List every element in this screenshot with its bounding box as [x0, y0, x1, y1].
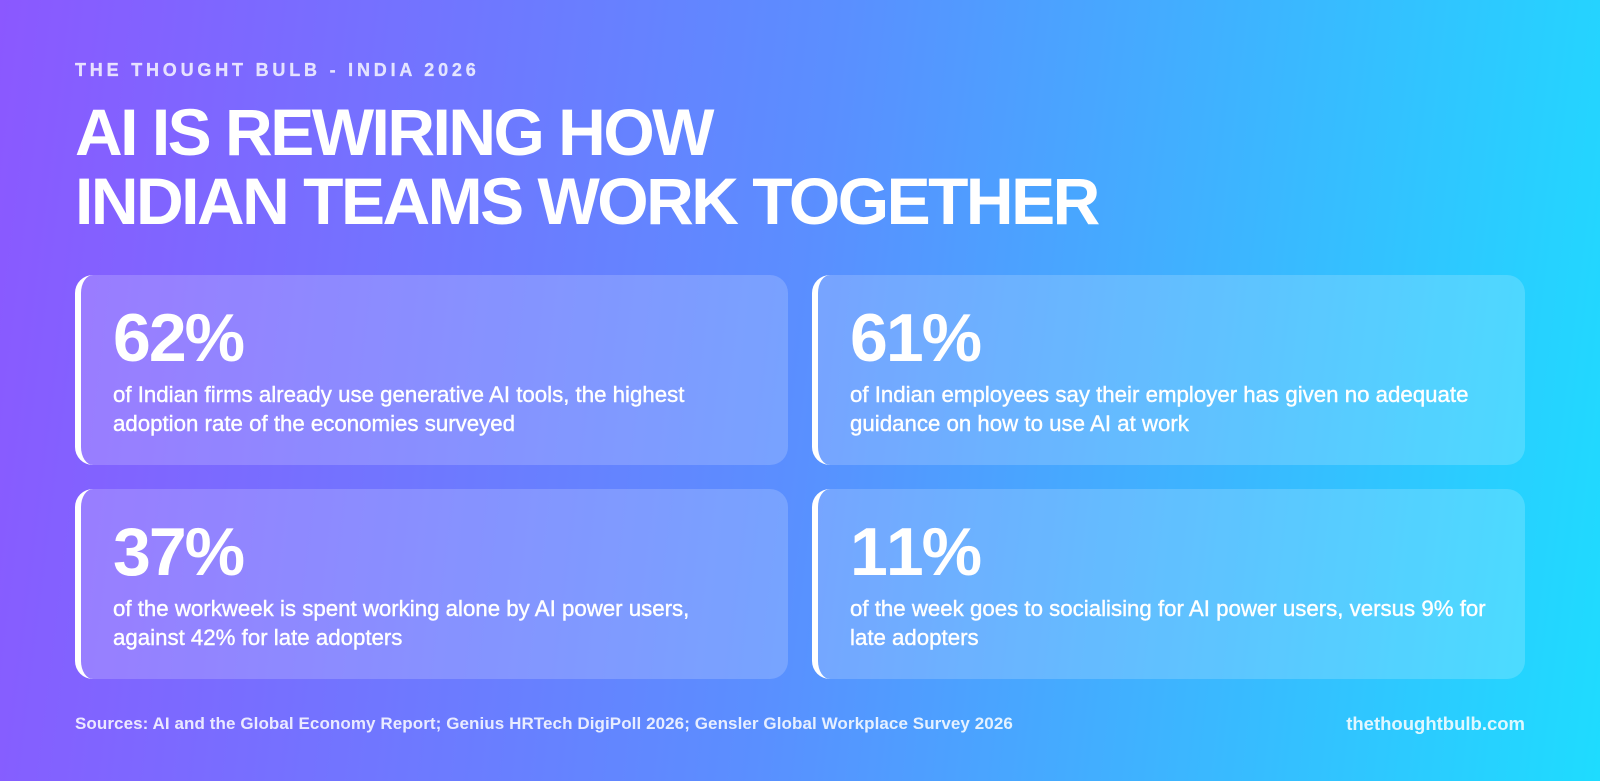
stat: 37%: 37% [113, 514, 243, 590]
description: firms: adoption rate of the economies surveyed [113, 411, 515, 436]
description: firms [113, 382, 684, 436]
stat: 11%: 11% [850, 514, 980, 590]
sources footer: Sources: AI and the Global Economy Report; Genius HRTech DigiPoll 2026; Gensler Global Workplace Survey 2026 [75, 714, 1013, 733]
description: socialising [850, 596, 1486, 650]
description: socialising: of the week goes to socialising for AI power users, versus 9% for [850, 596, 1486, 621]
description: guidance [850, 382, 1468, 436]
description: working alone: against 42% for late adopters [113, 625, 402, 650]
description: guidance: of Indian employees say their employer has given no adequate [850, 382, 1468, 407]
description: socialising: late adopters [850, 625, 979, 650]
description: working alone [113, 596, 689, 650]
title: AI IS REWIRING HOW [75, 95, 712, 169]
panel: working alone [75, 489, 788, 679]
panel: employer guidance [812, 275, 1525, 465]
stat: 62%: 62% [113, 300, 243, 376]
website link: thethoughtbulb.com [1346, 713, 1525, 734]
description: guidance: guidance on how to use AI at work [850, 411, 1189, 436]
panel: socialising [812, 489, 1525, 679]
stat: 61%: 61% [850, 300, 980, 376]
panel: firms using generative AI [75, 275, 788, 465]
title [75, 95, 1099, 238]
title: INDIAN TEAMS WORK TOGETHER [75, 164, 1098, 238]
description: working alone: of the workweek is spent working alone by AI power users, [113, 596, 689, 621]
eyebrow label: THE THOUGHT BULB - INDIA 2026 [75, 60, 480, 80]
description: firms: of Indian firms already use generative AI tools, the highest [113, 382, 684, 407]
